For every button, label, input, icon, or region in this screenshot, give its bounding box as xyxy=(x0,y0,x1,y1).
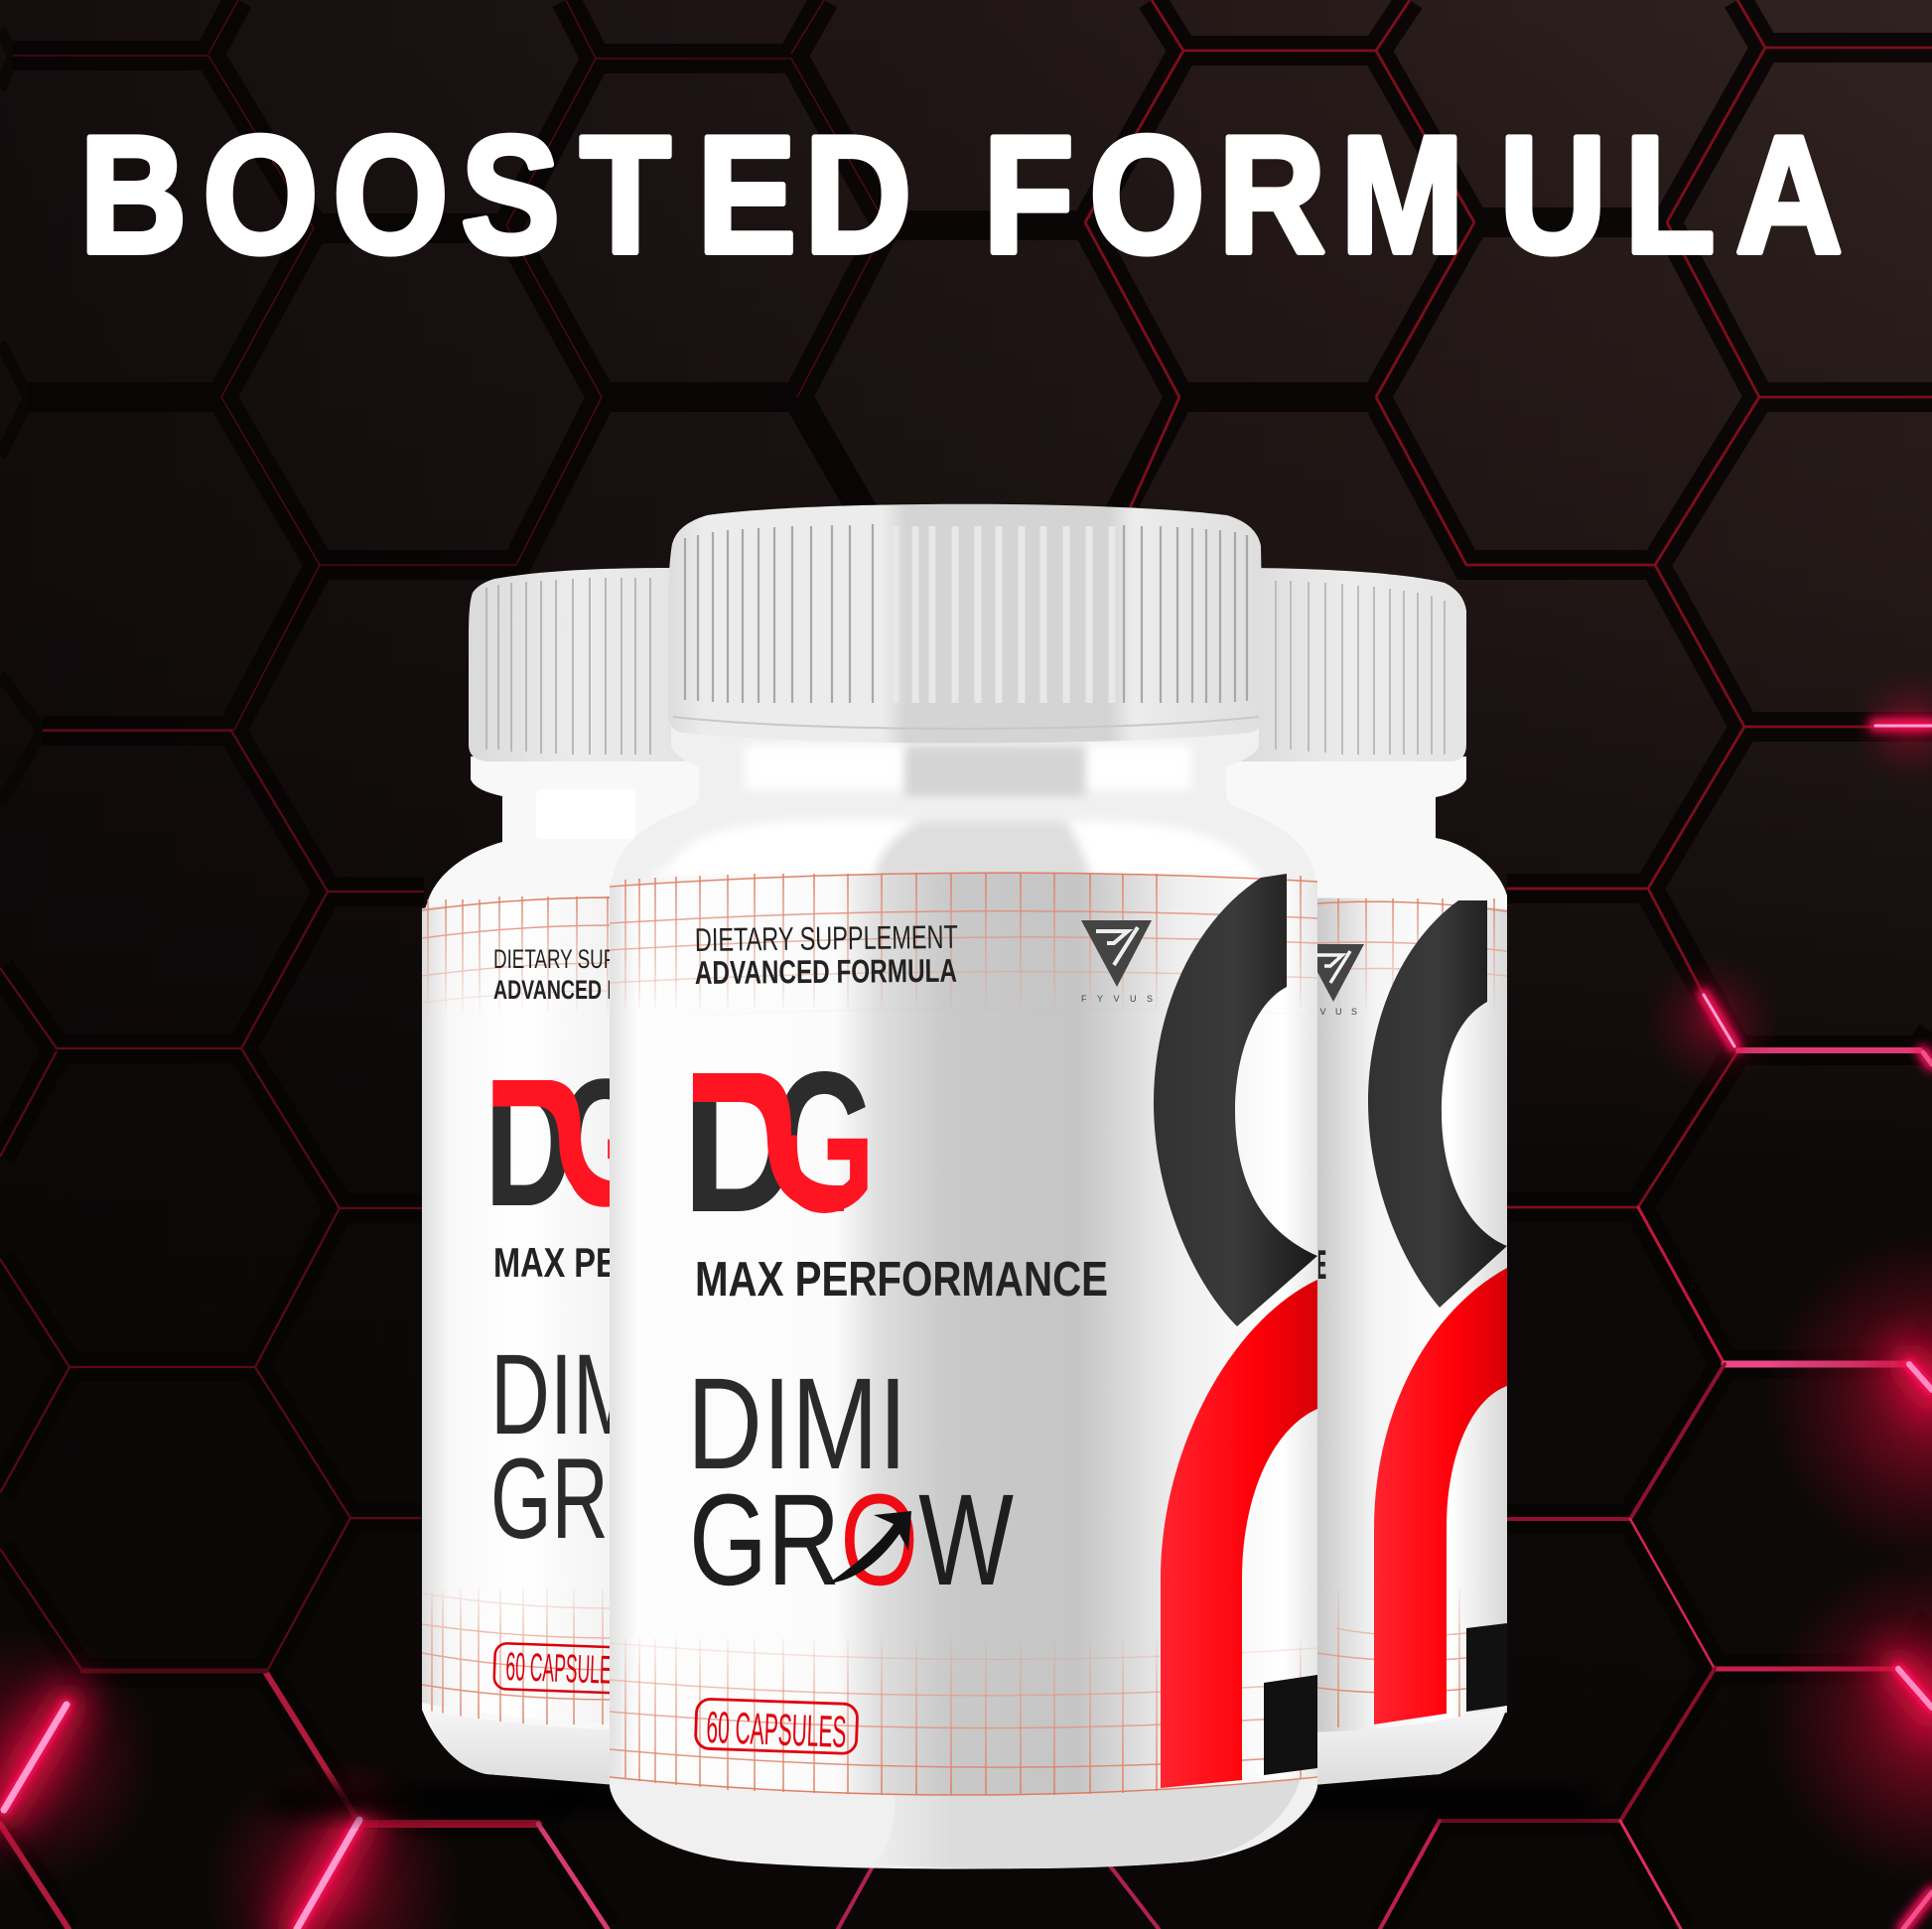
left bottle dietary text: ADVANCED FORMULA xyxy=(493,975,704,1005)
bottle: right, behind xyxy=(1211,568,1507,1792)
floor shadow under bottles xyxy=(268,1787,1598,1813)
right bottle black square xyxy=(1466,1623,1507,1712)
left bottle product name xyxy=(490,1331,744,1563)
hexagon grid: dim red seams, upper left xyxy=(13,0,887,730)
icon: growth arrow over the O xyxy=(828,1511,911,1584)
main bottle neck highlights xyxy=(645,745,1261,879)
left bottle max performance: MAX PERFORMANCE xyxy=(493,1239,827,1286)
main bottle capsule pill xyxy=(695,1699,858,1757)
hexagon grid: left-edge stubs xyxy=(0,30,43,804)
right bottle FYVUS logo xyxy=(1290,944,1367,1017)
right bottle base xyxy=(1291,1706,1507,1787)
main bottle max performance: MAX PERFORMANCE xyxy=(695,1253,1108,1307)
right bottle cap ridges xyxy=(1276,581,1445,755)
right bottle grid xyxy=(1317,898,1507,1727)
neon glow halos xyxy=(0,667,1932,1929)
main bottle capsule pill: 60 CAPSULES xyxy=(706,1702,847,1757)
left bottle neck and body xyxy=(422,755,715,1792)
bottle: left, behind: 60 CAPSULES xyxy=(505,1645,623,1693)
main bottle FYVUS logo: FYVUS xyxy=(1081,994,1164,1004)
left bottle capsule pill xyxy=(493,1643,634,1694)
main bottle cap ridges xyxy=(685,524,1247,703)
main bottle base shading xyxy=(874,1777,1301,1868)
left bottle grid xyxy=(422,896,616,1724)
right bottle FYVUS logo: FYVUS xyxy=(1290,1007,1367,1017)
left bottle product name: DIMI xyxy=(490,1331,664,1458)
main bottle DG logo: G xyxy=(772,1030,876,1254)
left bottle dietary text xyxy=(493,944,704,1005)
main bottle neck, shoulder and base xyxy=(610,725,1317,1868)
main bottle dietary text: DIETARY SUPPLEMENT xyxy=(695,918,958,958)
right bottle label xyxy=(1291,897,1507,1732)
hexagon grid: lit pink seams, lower area xyxy=(0,1050,1920,1929)
left bottle product name: GROW xyxy=(490,1436,744,1563)
main bottle FYVUS logo xyxy=(1081,920,1164,1004)
main bottle label xyxy=(610,873,1317,1795)
bottle: left, behind xyxy=(422,568,827,1792)
left bottle dietary text: DIETARY SUPPLEMENT xyxy=(493,944,704,974)
right bottle red arc xyxy=(1374,1268,1507,1724)
main bottle product name: DIMI: DIMI xyxy=(687,1350,907,1496)
main bottle cap centre ridges xyxy=(896,526,1112,703)
main bottle cap lip xyxy=(673,717,1259,729)
left bottle base xyxy=(424,1710,616,1785)
right bottle cap xyxy=(1231,568,1466,761)
left bottle cap xyxy=(469,568,685,761)
hexagon grid: dim red seams, lower left xyxy=(0,731,424,1673)
main bottle dietary text xyxy=(695,918,958,991)
main bottle DG logo: D xyxy=(682,1030,799,1254)
bottle: centre, front xyxy=(610,504,1317,1868)
bottle: right, behind: E xyxy=(1317,1241,1326,1288)
main bottle red arc xyxy=(1161,1280,1317,1788)
hexagon grid: stronger red seams, right xyxy=(1085,0,1932,1207)
left bottle cap ridges xyxy=(486,578,650,755)
right bottle neck and body xyxy=(1211,757,1507,1792)
neon lit segments xyxy=(4,725,1932,1929)
main bottle dietary text: ADVANCED FORMULA xyxy=(695,952,957,991)
main bottle grid: top band xyxy=(610,873,1317,1020)
left bottle neck highlight xyxy=(536,789,635,839)
title: BOOSTED FORMULA xyxy=(79,101,1843,288)
main bottle grid: bottom band xyxy=(610,1638,1317,1795)
left bottle label xyxy=(422,896,616,1722)
left bottle DG logo: D xyxy=(484,1040,574,1244)
main bottle cap xyxy=(668,504,1264,743)
main bottle black square xyxy=(1264,1675,1317,1775)
main bottle black arc xyxy=(1154,874,1317,1326)
right bottle black arc xyxy=(1368,900,1507,1308)
main bottle product name: GROW: GROW xyxy=(689,1466,1014,1612)
left bottle DG logo: G xyxy=(559,1040,650,1244)
